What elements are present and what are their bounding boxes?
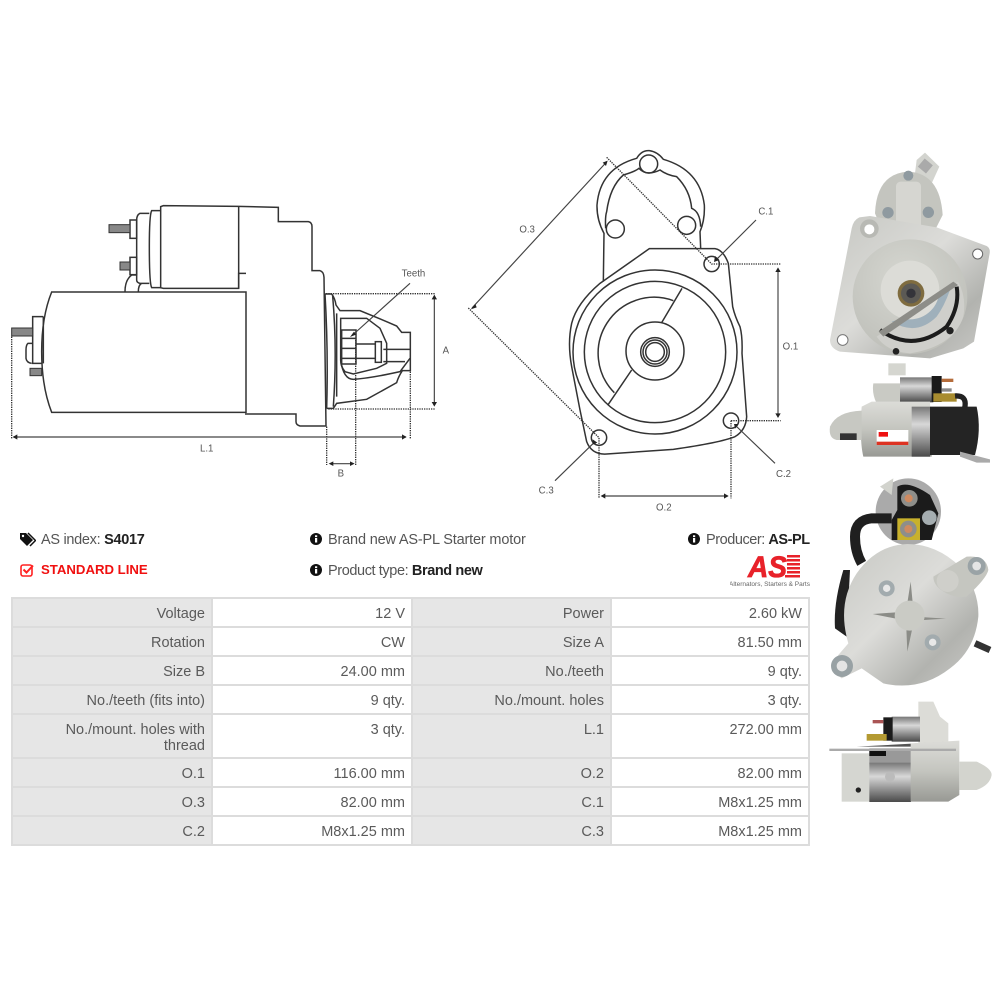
dimension labels: C.3 — [539, 485, 554, 496]
specification table: O.3 — [182, 794, 205, 810]
threaded terminals — [12, 225, 130, 376]
icon: checkbox — [20, 564, 34, 577]
logo: AS-PL — [730, 552, 811, 588]
specification table: thread — [164, 738, 205, 754]
dimension arrows — [13, 283, 437, 466]
dimension arrows — [471, 161, 781, 499]
specification table: M8x1.25 mm — [718, 824, 802, 840]
product photos — [829, 152, 992, 802]
info: product type: Product type: Brand new — [328, 563, 482, 579]
specification table: Power — [563, 606, 604, 622]
dimension labels: C.1 — [758, 206, 773, 217]
icon: info — [310, 564, 322, 576]
concentric drive housing — [573, 270, 737, 434]
specification table: 116.00 mm — [334, 766, 405, 782]
specification table: 82.00 mm — [341, 794, 405, 810]
dimension labels — [200, 269, 450, 480]
specification table: 12 V — [375, 606, 405, 622]
specification table: 9 qty. — [768, 664, 802, 680]
specification table: 24.00 mm — [341, 664, 405, 680]
specification table: 2.60 kW — [749, 606, 802, 622]
specification table: No./teeth — [545, 664, 604, 680]
upper mounting bracket — [597, 151, 704, 282]
specification table: C.1 — [581, 794, 604, 810]
motor housing — [26, 206, 326, 426]
photo: commutator end view — [831, 478, 990, 686]
specification table: Size A — [563, 634, 604, 650]
specification table: 272.00 mm — [729, 722, 802, 738]
specification table: No./mount. holes with — [66, 722, 205, 738]
specification table — [11, 597, 810, 846]
specification table: Voltage — [157, 606, 205, 622]
logo: AS-PL: Alternators, Starters & Parts — [730, 581, 811, 588]
dimension labels: O.3 — [519, 224, 535, 235]
specification table: Size B — [163, 664, 205, 680]
technical drawing: side view — [11, 204, 450, 480]
specification table: 81.50 mm — [738, 634, 802, 650]
dimension labels: B — [338, 469, 344, 480]
specification table: CW — [381, 634, 405, 650]
info: AS index: AS index: S4017 — [41, 532, 145, 548]
specification table: M8x1.25 mm — [718, 794, 802, 810]
specification table: No./mount. holes — [494, 692, 604, 708]
dimension labels — [519, 206, 798, 514]
technical drawing: front view — [468, 150, 798, 514]
dimension labels: Teeth — [402, 269, 425, 280]
specification table: O.2 — [581, 766, 604, 782]
dimension lines — [12, 294, 435, 465]
specification table: 3 qty. — [768, 692, 802, 708]
specification table: C.3 — [581, 824, 604, 840]
flange plate — [570, 249, 747, 454]
dimension labels: L.1 — [200, 443, 213, 454]
specification table: Rotation — [151, 634, 205, 650]
dimension labels: O.2 — [656, 503, 672, 514]
info: producer: Producer: AS-PL — [706, 532, 810, 548]
icon: info — [688, 533, 700, 545]
specification table: M8x1.25 mm — [321, 824, 405, 840]
icon: info — [310, 533, 322, 545]
specification table: 3 qty. — [371, 722, 405, 738]
dimension labels: C.2 — [776, 469, 791, 480]
specification table: O.1 — [182, 766, 205, 782]
dimension lines — [468, 157, 781, 498]
photo: side view — [829, 702, 992, 802]
specification table: 9 qty. — [371, 692, 405, 708]
dimension labels: A — [443, 345, 450, 356]
info: standard line: STANDARD LINE — [41, 562, 148, 577]
specification table: L.1 — [584, 722, 604, 738]
dimension labels: O.1 — [783, 342, 798, 353]
drive nose — [325, 294, 410, 408]
specification table: No./teeth (fits into) — [87, 692, 205, 708]
info: description: Brand new AS-PL Starter motor — [328, 532, 526, 548]
photo: drive end view — [830, 153, 990, 358]
specification table: 82.00 mm — [738, 766, 802, 782]
icon: tags — [20, 532, 36, 546]
photo: side view with label — [830, 363, 990, 463]
specification table: C.2 — [182, 824, 205, 840]
